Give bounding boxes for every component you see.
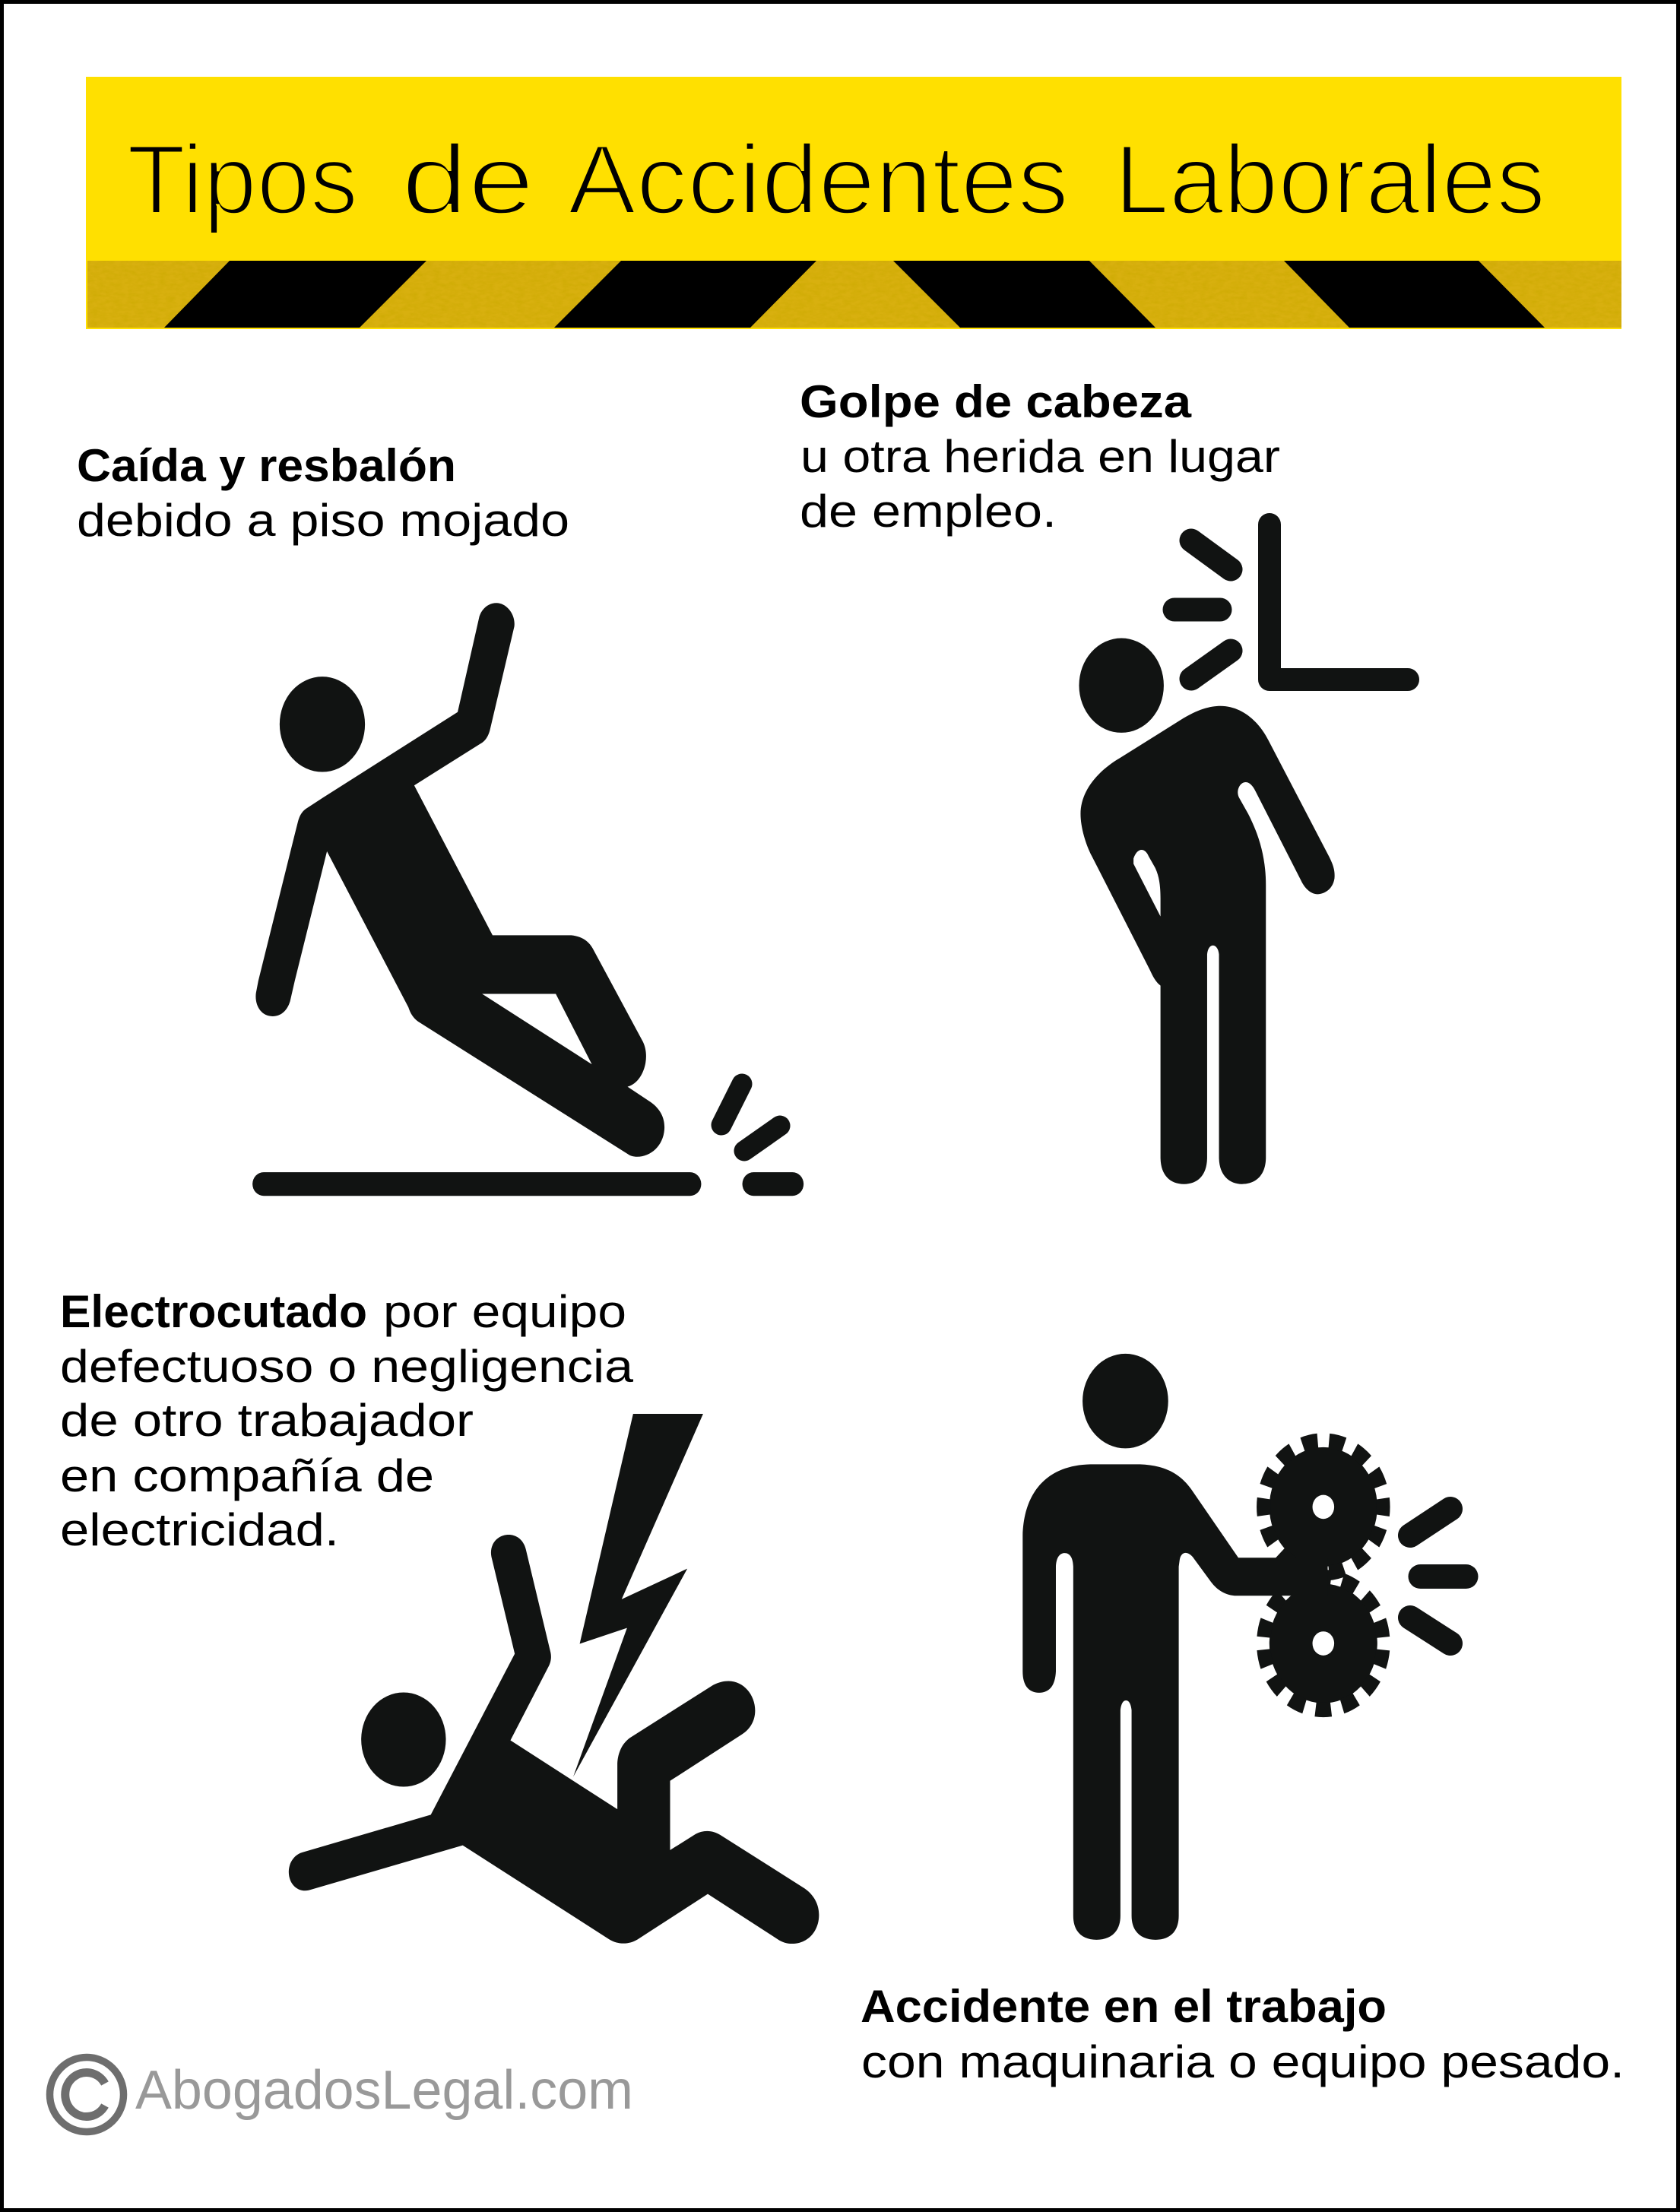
icon: person bumping head (1079, 639, 1335, 1184)
icon: impact marks (1174, 540, 1231, 679)
title: de (401, 124, 534, 235)
text block: accidente: Accidente en el trabajo (861, 1981, 1387, 2032)
title: Accidentes (568, 124, 1069, 235)
hazard stripe band (87, 261, 1621, 328)
text block: caída: Caída y resbalón (77, 440, 456, 491)
text block: golpe (800, 376, 1280, 537)
icon: slip splash marks (721, 1084, 780, 1151)
text block: caída (77, 440, 569, 546)
text block: electrocutado: en compañía de (60, 1450, 434, 1501)
icon: person electrocuted with lightning bolt (289, 1414, 819, 1944)
panel: electrocutado (60, 1286, 819, 1944)
icon: wall corner (1270, 524, 1408, 680)
title: Tipos (127, 124, 358, 235)
text block: electrocutado: de otro trabajador (60, 1395, 474, 1446)
icon: person slipping (252, 603, 804, 1196)
text block: golpe: Golpe de cabeza (800, 376, 1192, 427)
text block: electrocutado (60, 1286, 634, 1555)
text block: electrocutado: electricidad. (60, 1504, 339, 1555)
panel: caída y resbalón (77, 440, 804, 1196)
banner background (86, 77, 1621, 329)
title (127, 124, 1545, 235)
text block: golpe: de empleo. (800, 486, 1057, 537)
text block: electrocutado: defectuoso o negligencia (60, 1341, 634, 1392)
panel: golpe de cabeza (800, 376, 1408, 1184)
icon: person with hand in gears (1022, 1354, 1395, 1940)
gear lower (1251, 1564, 1395, 1722)
text block: electrocutado: Electrocutado (60, 1286, 367, 1337)
gear upper (1263, 1440, 1384, 1573)
brand text: AbogadosLegal.com (135, 2060, 633, 2121)
copyright footer (50, 2057, 633, 2131)
panel: accidente en el trabajo (861, 1354, 1625, 2087)
icon: gear impact marks (1410, 1509, 1466, 1643)
text block: accidente: con maquinaria o equipo pesado. (861, 2036, 1625, 2087)
title: Laborales (1114, 124, 1545, 235)
text block: caída: debido a piso mojado (77, 495, 569, 546)
text block: golpe: u otra herida en lugar (800, 431, 1280, 482)
icon: copyright symbol (50, 2057, 123, 2131)
text block: electrocutado: por equipo (383, 1286, 626, 1337)
text block: accidente (861, 1981, 1625, 2087)
title banner (86, 77, 1621, 329)
